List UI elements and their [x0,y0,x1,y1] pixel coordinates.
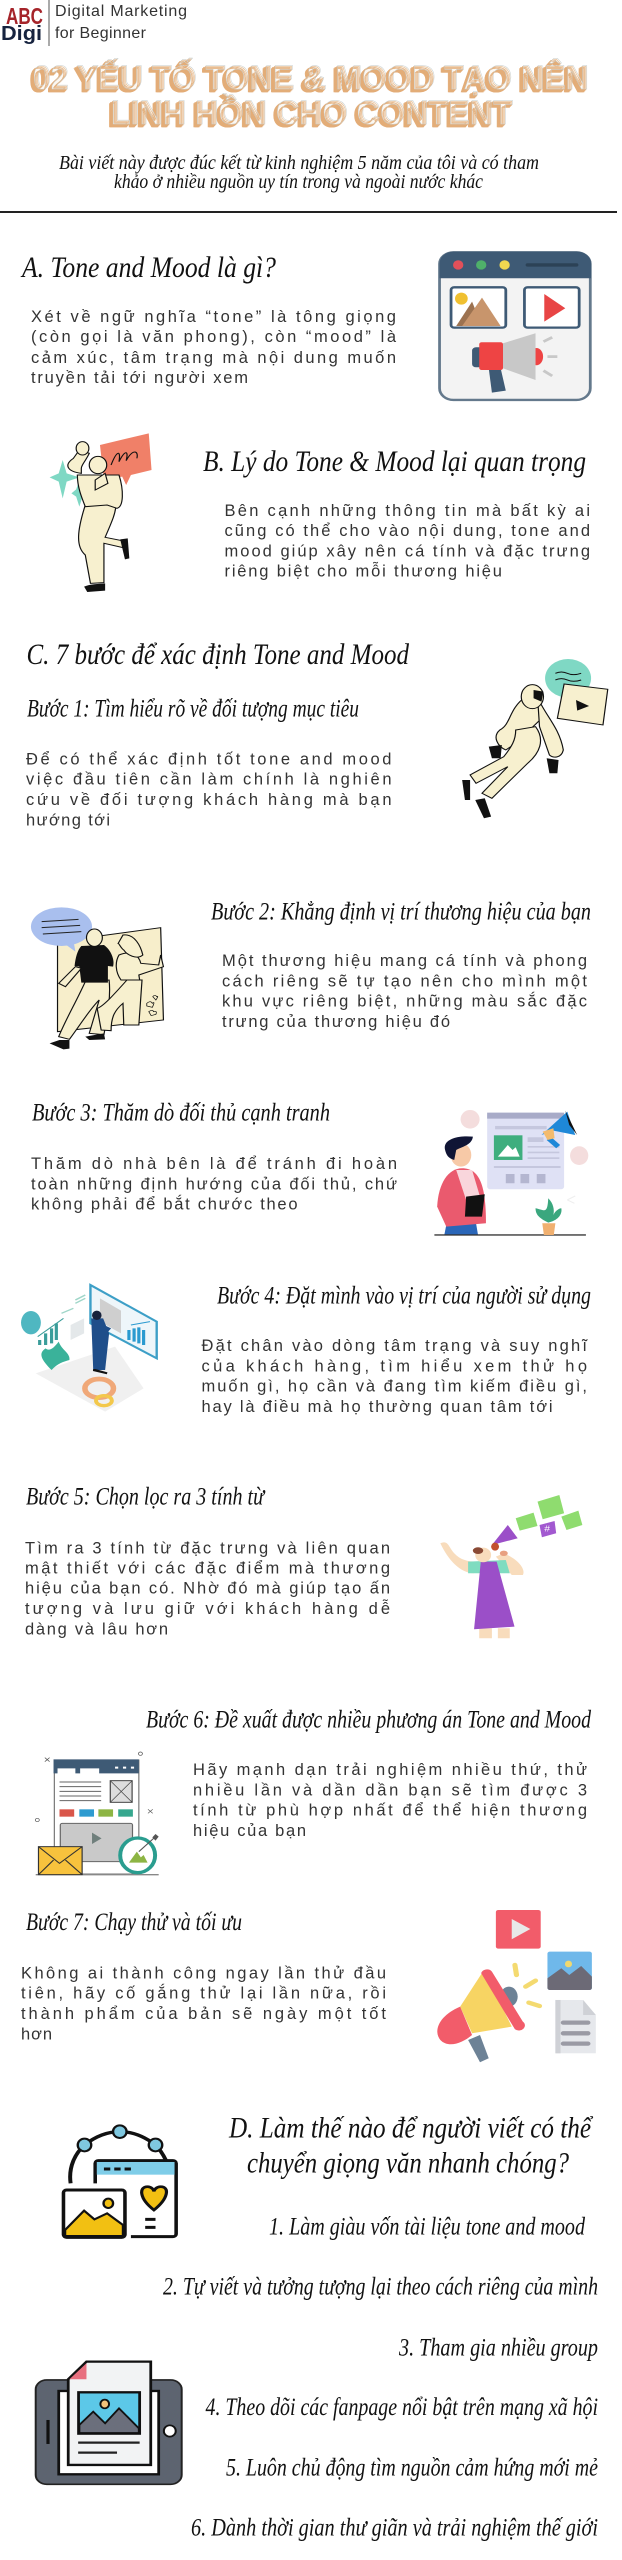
step 6 body: tính từ phù hợp nhất để thể hiện thương [193,1802,587,1820]
step 2 [31,898,591,1049]
logo: Digital Marketing [55,3,187,20]
step 5 body: hiệu của bạn có. Nhờ đó mà giúp tạo ấn [25,1580,390,1598]
step 3 body [31,1155,397,1214]
body A: truyền tải tới người xem [31,369,248,387]
step 6 body: hiệu của bạn [193,1822,306,1840]
section C [21,638,608,2062]
step 5 body: tượng và lưu giữ với khách hàng dễ [25,1599,390,1618]
step 2 body [222,952,587,1031]
icon: browser window with megaphone [440,252,591,400]
step 1 body: Để có thể xác định tốt tone and mood [26,750,391,768]
heading C: C. 7 bước để xác định Tone and Mood [26,638,410,671]
step 7 heading: Bước 7: Chạy thử và tối ưu [26,1909,242,1936]
step 4 body: hay là điều mà họ thường quan tâm tới [202,1398,552,1416]
illustration: woman with megaphone [440,1495,582,1638]
step 7 body: tiên, hãy cố gắng thử lại lần nữa, rồi [21,1984,386,2003]
step 1 body: cứu về đối tượng khách hàng mà bạn [26,791,392,809]
illustration: floating person with video [462,659,608,818]
list of tips [163,2213,598,2542]
step 7 [21,1909,596,2062]
body B [224,502,590,581]
body B: cũng có thể cho vào nội dung, tone and [224,522,590,540]
body B: riêng biệt cho mỗi thương hiệu [224,562,502,581]
step 1 [26,659,608,829]
illustration: talking person [50,433,152,592]
illustration: couple with poster [31,907,163,1049]
step 2 body: cách riêng sẽ tự tạo nên cho mình một [222,972,587,990]
illustration: man at data board [21,1285,157,1412]
step 5 body: mật thiết với các đặc điểm mà thương [25,1559,390,1577]
heading A: A. Tone and Mood là gì? [20,251,276,284]
heading D [228,2111,593,2179]
step 2 body: khu vực riêng biệt, những màu sắc đặc [222,992,587,1011]
step 3 heading: Bước 3: Thăm dò đối thủ cạnh tranh [32,1100,330,1127]
body A [31,308,397,387]
step 6 body: Hãy mạnh dạn trải nghiệm nhiều thứ, thử [193,1761,587,1779]
step 4 [21,1282,591,1416]
step 6 body: nhiều lần và dần dần bạn sẽ tìm được 3 [193,1781,587,1799]
body A: Xét về ngữ nghĩa “tone” là tông giọng [31,308,396,326]
step 5 body: dàng và lâu hơn [25,1620,168,1638]
intro text [59,152,539,193]
illustration: megaphone with media tiles [437,1910,596,2062]
step 7 body: thành phẩm của bản sẽ ngày một tốt [21,2005,386,2023]
step 4 body: Đặt chân vào dòng tâm trạng và suy nghĩ [202,1337,588,1355]
step 3 body: không phải để bắt chước theo [31,1195,298,1214]
intro text: khảo ở nhiều nguồn uy tín trong và ngoài nước khác [114,171,483,193]
step 5 body: Tìm ra 3 tính từ đặc trưng và liên quan [25,1539,390,1557]
illustration: man with web page [434,1110,588,1236]
intro text: Bài viết này được đúc kết từ kinh nghiệm 5 năm của tôi và có tham [59,152,539,174]
step 3 body: toàn những định hướng của đối thủ, chứ [31,1175,397,1193]
step 7 body: hơn [21,2025,52,2043]
body B: mood giúp xây nên cá tính và đặc trưng [224,543,590,561]
step 4 body [202,1337,588,1416]
title [33,58,589,132]
logo: for Beginner [55,25,147,42]
section D [36,2111,598,2542]
step 3 body: Thăm dò nhà bên là để tránh đi hoàn [31,1155,397,1173]
illustration: web layout with envelope [35,1752,159,1875]
step 4 body: của khách hàng, tìm hiểu xem thử họ [202,1357,587,1375]
step 2 body: Một thương hiệu mang cá tính và phong [222,952,587,970]
body A: (còn gọi là văn phong), còn “mood” là [31,328,397,346]
step 2 body: trưng của thương hiệu đó [222,1013,450,1031]
icon: tablet with document [36,2362,182,2484]
step 6 [35,1706,591,1875]
icon: content network [63,2125,176,2237]
step 3 [31,1100,588,1236]
section B [50,433,590,592]
step 5 body [25,1539,390,1638]
logo: ABC [6,3,43,29]
step 7 body [21,1964,386,2043]
step 7 body: Không ai thành công ngay lần thử đầu [21,1964,386,1982]
step 5 heading: Bước 5: Chọn lọc ra 3 tính từ [26,1483,266,1510]
body A: cảm xúc, tâm trạng mà nội dung muốn [31,349,396,367]
step 1 body: hướng tới [26,811,110,829]
section A [20,251,591,400]
step 1 body [26,750,392,829]
step 5 [25,1483,582,1638]
title: 02 YẾU TỐ TONE & MOOD TẠO NÊN [33,58,589,97]
step 4 body: muốn gì, họ cần và đang tìm kiếm điều gì, [202,1378,587,1396]
step 6 body [193,1761,587,1840]
step 1 heading: Bước 1: Tìm hiểu rõ về đối tượng mục tiêu [27,696,359,723]
title: LINH HỒN CHO CONTENT [111,94,513,132]
illustration: woman with megaphone: # [544,1524,551,1534]
logo: Digi [1,23,42,45]
body B: Bên cạnh những thông tin mà bất kỳ ai [224,502,590,520]
step 1 body: việc đầu tiên cần làm chính là nghiên [26,771,392,789]
logo [1,0,187,46]
